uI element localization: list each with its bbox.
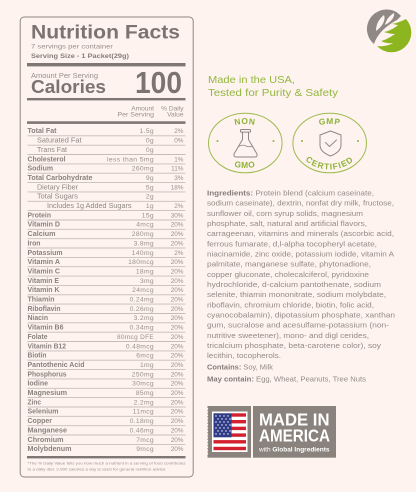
nutrient table: 0.24mg: [130, 296, 154, 304]
nutrient table: 20%: [171, 371, 184, 378]
nutrient table: [28, 128, 186, 453]
nutrient table: Magnesium: [28, 390, 67, 397]
nutrient table: 20%: [171, 278, 184, 285]
nutrient table: 24mcg: [132, 287, 154, 294]
servings per container: 7 servings per container: [31, 44, 114, 50]
nutrient table: Iron: [28, 240, 40, 247]
nutrient table: 2%: [174, 128, 184, 135]
nutrient table: 20%: [171, 231, 184, 238]
nutrient table: 20%: [171, 390, 184, 397]
made in america text: [258, 410, 330, 454]
nutrient table: 11mcg: [133, 409, 154, 416]
icon: american flag: [212, 412, 248, 452]
nutrient table: Vitamin B12: [28, 343, 66, 350]
made in america text: MADE IN: [259, 410, 330, 430]
nutrient table: Riboflavin: [28, 306, 60, 313]
ingredients text: Ingredients: Protein blend (calcium caseinate,: [207, 188, 374, 198]
column headers: Amount: [131, 106, 154, 112]
nutrient table: 30%: [171, 212, 184, 219]
nutrient table: Sodium: [28, 166, 53, 173]
ingredients text: selenite, thiamin mononitrate, sodium molybdate,: [207, 290, 386, 299]
nutrient table: 3.8mg: [134, 240, 154, 247]
nutrient table: 180mcg: [128, 259, 154, 266]
nutrient table: 20%: [171, 296, 184, 304]
nutrient table: 20%: [171, 315, 184, 322]
nutrient table: 0.48mcg: [126, 343, 154, 350]
nutrient table: 20%: [171, 399, 184, 406]
nutrient table: Total Fat: [28, 128, 57, 135]
nutrient table: 20%: [171, 334, 184, 341]
ingredients text: hydrochloride, d-calcium pantothenate, sodium: [207, 280, 381, 289]
icon: logo: [367, 9, 411, 52]
panel: nutrition facts: [20, 17, 193, 477]
nutrient table: 0g: [146, 147, 154, 154]
nutrient table: 20%: [171, 409, 184, 416]
nutrient table: Zinc: [28, 399, 41, 406]
nutrient table: 280mg: [132, 231, 154, 238]
nutrient table: 0.18mg: [130, 418, 154, 425]
nutrient table: 20%: [171, 362, 184, 369]
ingredients text: phosphate, salt, natural and artificial flavors,: [207, 219, 367, 228]
nutrient table: Vitamin B6: [28, 325, 64, 332]
badge: non GMO: [208, 112, 283, 174]
nutrient table: Iodine: [28, 381, 48, 388]
icon: flask: [234, 130, 257, 157]
footnote: to a daily diet. 2,000 calories a day is used for general nutrition advice: [28, 466, 166, 472]
nutrient table: Pantothenic Acid: [28, 362, 84, 369]
ingredients text: carrageenan, vitamins and minerals (ascorbic acid,: [207, 229, 394, 238]
footnote: [28, 460, 186, 472]
ingredients text: sodium caseinate), dextrin, nonfat dry milk, fructose,: [207, 199, 394, 208]
heading: made in the USA: [208, 75, 339, 99]
nutrient table: 30mcg: [132, 381, 154, 388]
nutrient table: 6mcg: [136, 353, 154, 360]
ingredients text: gum, sucralose and acesulfame-potassium (non-: [207, 321, 390, 330]
nutrient table: 5g: [146, 184, 154, 191]
nutrient table: 11%: [171, 166, 184, 173]
nutrient table: Vitamin A: [28, 259, 60, 266]
ingredients text: tricalcium phosphate, beta-carotene color), soy: [207, 341, 381, 350]
nutrient table: Copper: [28, 418, 52, 425]
nutrient table: Total Sugars: [37, 194, 79, 201]
nutrient table: Total Carbohydrate: [28, 175, 93, 182]
nutrient table: Chromium: [28, 437, 64, 444]
made in america text: AMERICA: [259, 426, 330, 446]
nutrient table: 18%: [171, 184, 184, 191]
nutrient table: 0.34mg: [130, 325, 154, 332]
nutrient table: 20%: [171, 287, 184, 294]
heading: made in the USA: Made in the USA,: [208, 75, 295, 86]
nutrient table: Dietary Fiber: [37, 184, 79, 191]
nutrient table: 20%: [171, 343, 184, 350]
nutrient table: 4mcg: [136, 222, 154, 229]
nutrient table: 1%: [174, 156, 184, 163]
nutrient table: Thiamin: [28, 296, 54, 304]
nutrient table: 20%: [171, 381, 184, 388]
nutrient table: 3.2mg: [134, 315, 154, 322]
calories value: 100: [135, 65, 182, 100]
nutrient table: Saturated Fat: [37, 138, 82, 145]
nutrient table: Includes 1g Added Sugars: [47, 203, 132, 210]
badge: GMP certified: GMP: [319, 118, 340, 125]
nutrient table: Niacin: [28, 315, 48, 322]
ingredients text: copper gluconate, cholecalciferol, pyridoxine: [207, 270, 369, 279]
nutrient table: 2%: [174, 203, 184, 210]
nutrient table: 20%: [171, 325, 184, 332]
icon: shield: [320, 131, 341, 156]
nutrient table: 20%: [171, 268, 184, 276]
nutrient table: 250mg: [132, 371, 154, 378]
may contain: May contain: Egg, Wheat, Peanuts, Tree Nuts: [207, 374, 366, 384]
nutrient table: 20%: [171, 240, 184, 247]
ingredients text: niacinamide, zinc oxide, potassium iodide, vitamin A: [207, 250, 394, 258]
nutrient table: 20%: [171, 259, 184, 266]
nutrient table: Potassium: [28, 250, 62, 257]
nutrient table: Phosphorus: [28, 371, 67, 378]
badge: non GMO: GMO: [234, 162, 254, 168]
contains: Contains: Soy, Milk: [207, 362, 273, 372]
nutrient table: 20%: [171, 418, 184, 425]
column headers: Value: [167, 112, 184, 118]
nutrient table: Vitamin D: [28, 222, 60, 229]
ingredients text: palmitate, manganese sulfate, phytonadione,: [207, 260, 371, 269]
calories label: Calories: [31, 76, 106, 97]
serving size: Serving Size - 1 Packet(29g): [31, 53, 129, 60]
ingredients text: cyanocobalamin), dipotassium phosphate, xanthan: [207, 310, 395, 320]
nutrient table: 20%: [171, 427, 184, 434]
nutrient table: 1.5g: [140, 128, 154, 135]
ingredients text: sunflower oil, corn syrup solids, magnesium: [207, 209, 363, 218]
nutrient table: 7mcg: [136, 437, 154, 444]
amount per serving: Amount Per Serving: [31, 71, 98, 80]
column headers: Per Serving: [118, 112, 154, 118]
column headers: % Daily: [161, 106, 184, 112]
nutrient table: Vitamin K: [28, 287, 60, 294]
nutrient table: 15g: [142, 212, 154, 219]
nutrient table: 85mg: [136, 390, 154, 397]
nutrient table: 140mg: [132, 250, 154, 257]
nutrient table: less than 5mg: [107, 156, 154, 163]
nutrient table: 3%: [174, 175, 184, 182]
ingredients text: nutritive sweetener), mono- and digl cerides,: [207, 331, 369, 340]
nutrient table: 2%: [174, 250, 184, 257]
nutrient table: 20%: [171, 222, 184, 229]
nutrient table: 2g: [146, 194, 154, 201]
badge: GMP certified: [292, 112, 367, 174]
nutrient table: 260mg: [132, 166, 154, 173]
nutrient table: 9mcg: [136, 446, 154, 453]
nutrient table: Vitamin E: [28, 278, 59, 285]
nutrient table: 0g: [146, 138, 154, 145]
nutrient table: 20%: [171, 446, 184, 453]
nutrient table: 1mg: [140, 362, 154, 369]
nutrient table: 18mg: [136, 268, 154, 276]
ingredients text: lecithin, tocopherols.: [207, 351, 281, 360]
badge: non GMO: NON: [234, 118, 255, 125]
nutrient table: 1g: [146, 203, 154, 210]
nutrient table: Protein: [28, 212, 51, 219]
footnote: *The % Daily Value tells you how much a nutrient in a serving of food contributes: [28, 460, 186, 466]
nutrient table: Trans Fat: [37, 147, 67, 154]
ingredients text: riboflavin, chromium chloride, biotin, folic acid,: [207, 300, 374, 309]
ingredients text: ferrous fumarate, d,l-alpha tocopheryl acetate,: [207, 239, 377, 248]
nutrient table: Cholesterol: [28, 156, 66, 163]
nutrient table: Vitamin C: [28, 268, 60, 276]
ingredients text: [207, 188, 395, 360]
nutrient table: 20%: [171, 353, 184, 360]
badge: made in america: [208, 406, 336, 458]
nutrient table: Manganese: [28, 427, 67, 434]
badge: GMP certified: CERTIFIED: [306, 156, 352, 170]
nutrient table: Calcium: [28, 231, 56, 238]
nutrient table: 0.26mg: [130, 306, 154, 313]
title: Nutrition Facts: [31, 22, 180, 44]
nutrient table: 0%: [174, 138, 184, 145]
nutrient table: 80mcg DFE: [117, 334, 154, 341]
nutrient table: 20%: [171, 437, 184, 444]
nutrient table: Biotin: [28, 353, 46, 360]
nutrient table: 9g: [146, 175, 154, 182]
nutrient table: 2.2mg: [134, 399, 154, 406]
nutrient table: Molybdenum: [28, 446, 72, 453]
column headers: [118, 106, 184, 118]
nutrient table: 0.46mg: [130, 427, 154, 434]
nutrient table: Folate: [28, 334, 48, 341]
nutrient table: 3mg: [140, 278, 154, 285]
made in america text: with Global Ingredients: [258, 448, 330, 454]
nutrient table: 20%: [171, 306, 184, 313]
heading: made in the USA: Tested for Purity & Safety: [208, 88, 339, 99]
nutrient table: Selenium: [28, 409, 58, 416]
